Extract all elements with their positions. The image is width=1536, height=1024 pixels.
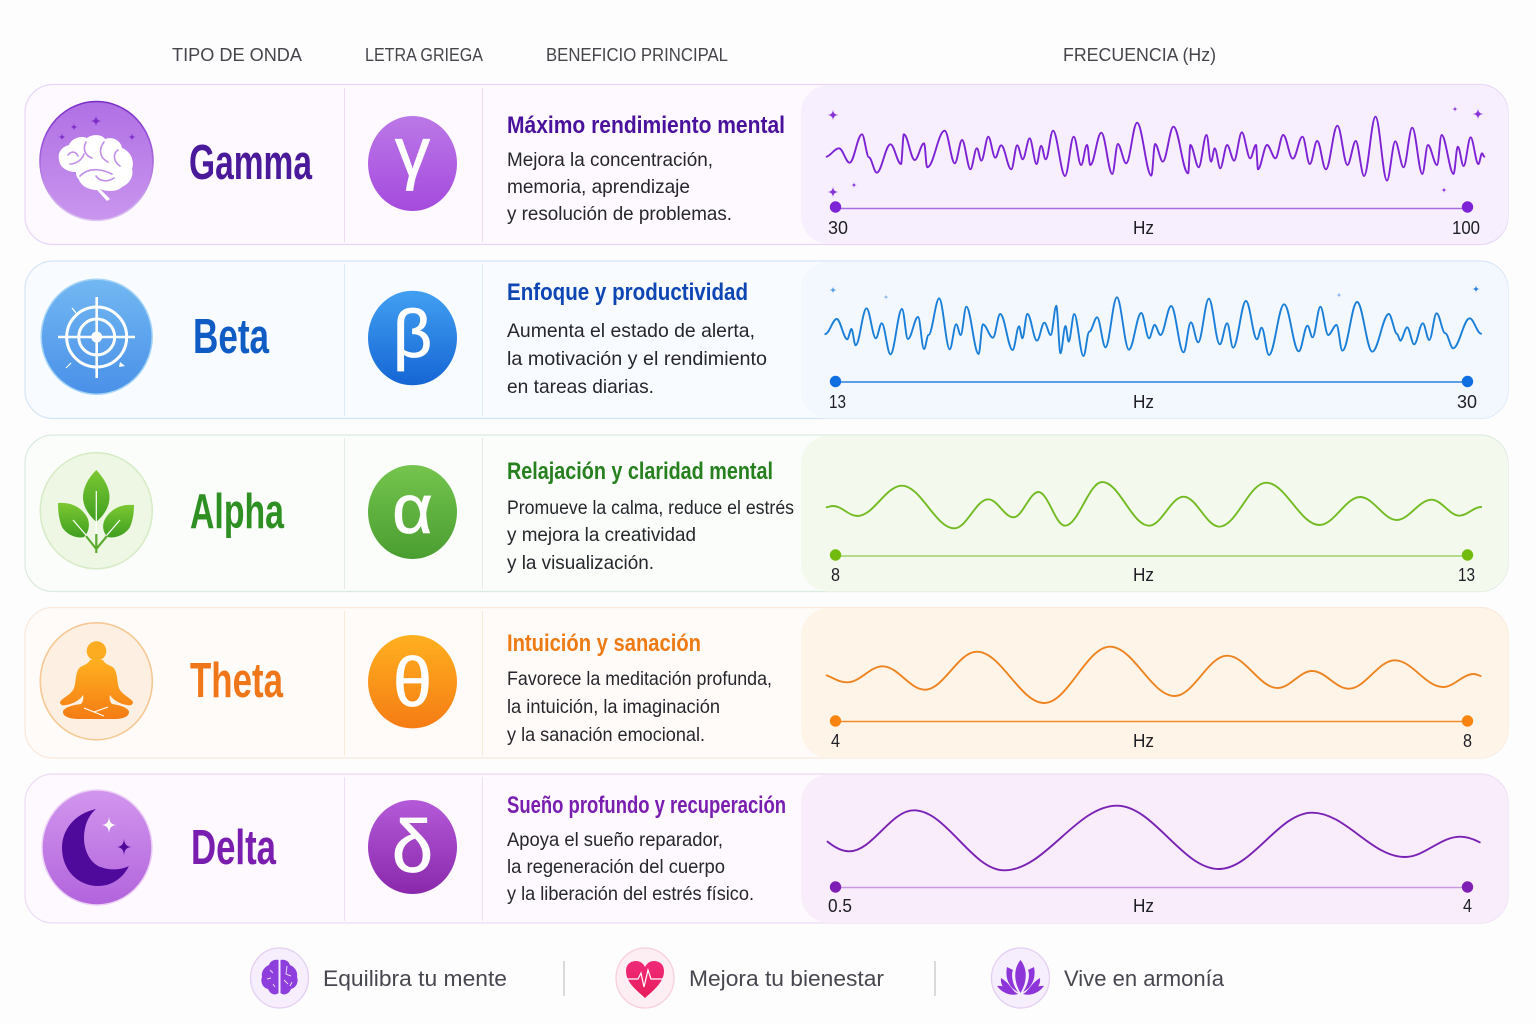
panel: theta: [25, 608, 1508, 758]
benefit: beta: [507, 279, 767, 398]
header: letra griega: LETRA GRIEGA: [365, 45, 483, 65]
column headers: [172, 45, 1216, 65]
greek letter: gamma: [368, 113, 457, 211]
wave name: delta: Delta: [191, 821, 277, 875]
range slider: gamma: [828, 201, 1480, 238]
range slider: theta: 4: [831, 731, 840, 751]
frequency panel: delta: [801, 774, 1508, 923]
benefit: beta: Enfoque y productividad: [507, 279, 748, 306]
icon: leaves: [40, 453, 152, 569]
range slider: beta: 13: [829, 392, 846, 412]
wave name: gamma: Gamma: [189, 136, 313, 190]
benefit: gamma: y resolución de problemas.: [507, 203, 732, 225]
wave name: beta: Beta: [193, 310, 270, 364]
benefit: beta: en tareas diarias.: [507, 376, 654, 398]
wave line: beta: [825, 297, 1481, 356]
benefit: beta: Aumenta el estado de alerta,: [507, 320, 755, 342]
range slider: delta: Hz: [1133, 896, 1154, 916]
wave line: delta: [828, 806, 1480, 870]
frequency panel: beta: [801, 262, 1508, 418]
benefit: theta: [507, 630, 772, 746]
greek letter: beta: [368, 291, 457, 385]
range slider: alpha: [830, 549, 1475, 585]
label: equilibra tu mente: Equilibra tu mente: [323, 966, 507, 991]
wave line: theta: [827, 647, 1481, 703]
panel: gamma: [25, 84, 1508, 244]
icon: footer lotus: [992, 948, 1050, 1008]
benefit: alpha: y mejora la creatividad: [507, 524, 696, 546]
benefit: alpha: Relajación y claridad mental: [507, 458, 773, 485]
range slider: alpha: 8: [831, 565, 840, 585]
range slider: alpha: Hz: [1133, 565, 1154, 585]
label: vive en armonia: Vive en armonía: [1064, 966, 1225, 991]
benefit: beta: la motivación y el rendimiento: [507, 348, 767, 370]
range slider: alpha: 13: [1458, 565, 1475, 585]
benefit: theta: Intuición y sanación: [507, 630, 701, 657]
frequency panel: gamma: [801, 85, 1508, 244]
wave name: theta: Theta: [190, 654, 284, 708]
frequency panel: theta: [801, 608, 1508, 758]
icon: footer brain: [250, 948, 308, 1008]
greek letter: theta: [368, 635, 457, 728]
greek letter: gamma: γ: [395, 113, 430, 191]
wave line: alpha: [827, 482, 1481, 528]
range slider: beta: Hz: [1133, 392, 1154, 412]
greek letter: alpha: α: [392, 470, 433, 548]
label: mejora tu bienestar: Mejora tu bienestar: [689, 966, 884, 991]
benefit: alpha: Promueve la calma, reduce el estrés: [507, 497, 794, 519]
header: tipo de onda: TIPO DE ONDA: [172, 45, 302, 65]
range slider: theta: 8: [1463, 731, 1472, 751]
panel: delta: [25, 774, 1508, 923]
range slider: gamma: 30: [828, 218, 848, 238]
header: beneficio principal: BENEFICIO PRINCIPAL: [546, 45, 728, 65]
benefit: alpha: [507, 458, 794, 574]
benefit: delta: [507, 792, 786, 905]
benefit: delta: y la liberación del estrés físico.: [507, 883, 754, 905]
benefit: gamma: Mejora la concentración,: [507, 149, 713, 171]
range slider: beta: 30: [1457, 392, 1477, 412]
icon: moon and stars: [42, 790, 152, 905]
greek letter: beta: β: [393, 296, 432, 372]
benefit: delta: Apoya el sueño reparador,: [507, 829, 723, 851]
range slider: delta: [828, 881, 1473, 916]
range slider: delta: 0.5: [828, 896, 852, 916]
panel: beta: [25, 261, 1508, 418]
benefit: theta: Favorece la meditación profunda,: [507, 668, 772, 690]
benefit: gamma: [507, 112, 785, 225]
footer: benefits strip: [250, 948, 1225, 1008]
frequency panel: alpha: [801, 436, 1508, 592]
greek letter: delta: δ: [392, 805, 433, 888]
icon: target: [41, 279, 152, 394]
greek letter: theta: θ: [393, 643, 432, 721]
benefit: delta: la regeneración del cuerpo: [507, 856, 725, 878]
benefit: alpha: y la visualización.: [507, 552, 654, 574]
range slider: beta: [829, 376, 1477, 412]
benefit: gamma: Máximo rendimiento mental: [507, 112, 785, 139]
wave name: alpha: Alpha: [190, 485, 285, 539]
range slider: delta: 4: [1463, 896, 1472, 916]
panel: alpha: [25, 435, 1508, 592]
range slider: gamma: 100: [1452, 218, 1480, 238]
benefit: theta: la intuición, la imaginación: [507, 696, 720, 718]
greek letter: delta: [368, 800, 457, 894]
benefit: delta: Sueño profundo y recuperación: [507, 792, 786, 819]
range slider: theta: [830, 715, 1473, 751]
benefit: gamma: memoria, aprendizaje: [507, 176, 690, 198]
range slider: gamma: Hz: [1133, 218, 1154, 238]
header: frecuencia: FRECUENCIA (Hz): [1063, 45, 1216, 65]
greek letter: alpha: [368, 465, 457, 559]
icon: meditating figure: [40, 623, 152, 740]
icon: footer heart: [616, 948, 674, 1008]
benefit: theta: y la sanación emocional.: [507, 724, 705, 746]
range slider: theta: Hz: [1133, 731, 1154, 751]
icon: brain: [40, 102, 153, 220]
wave line: gamma: [827, 117, 1484, 181]
